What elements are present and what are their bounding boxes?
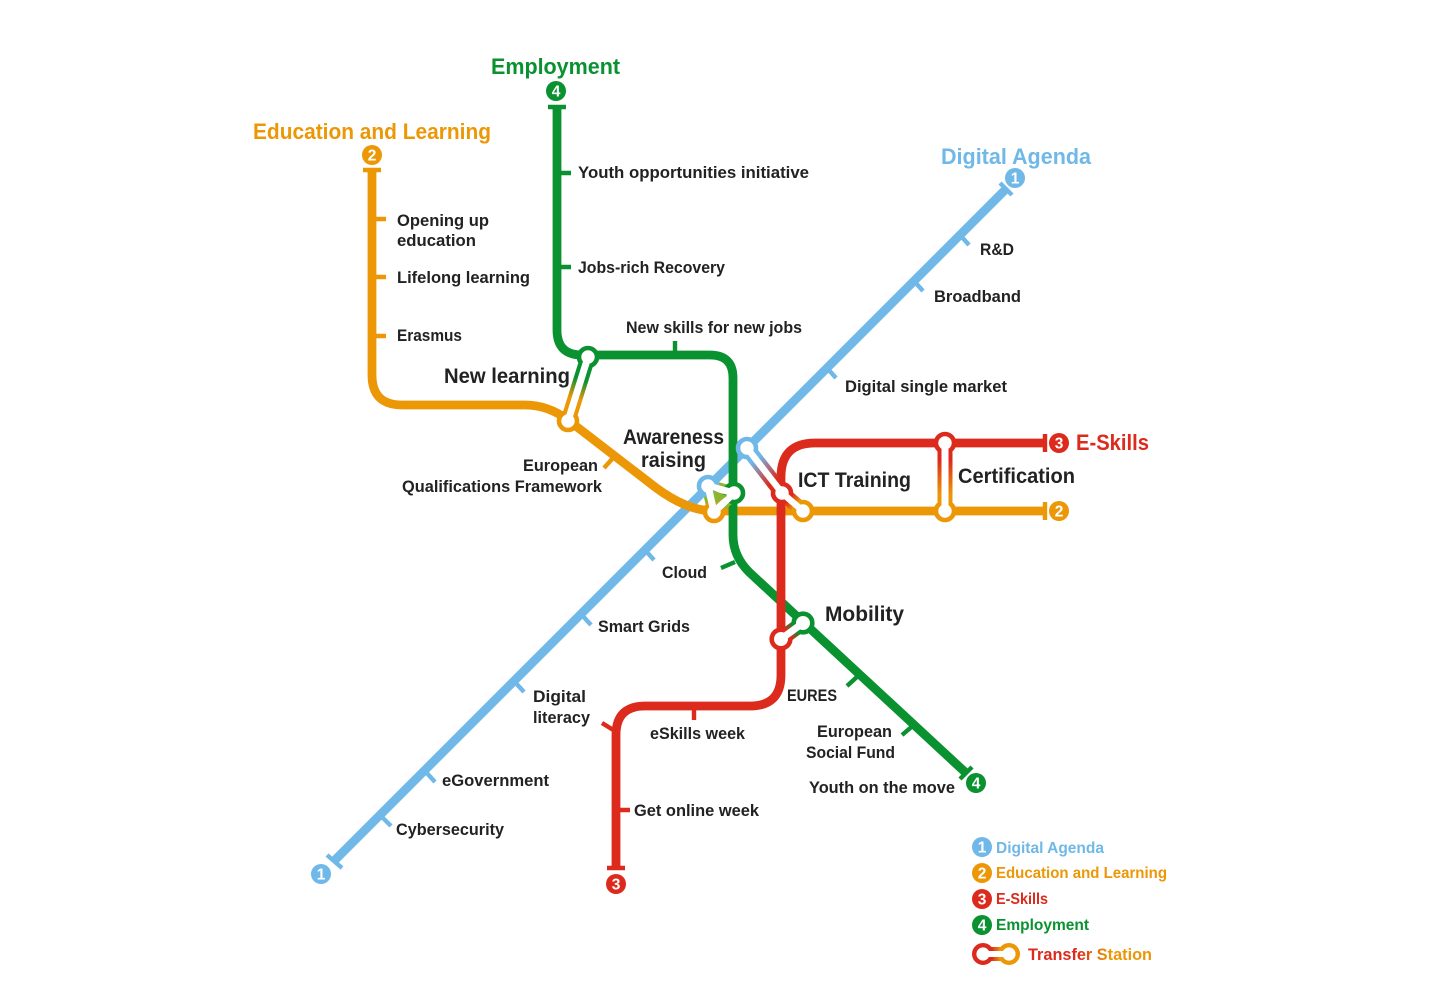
label: Opening up education: education xyxy=(397,231,476,250)
terminal: E-Skills right: 3 xyxy=(1055,436,1064,452)
label: R&D: R&D xyxy=(980,240,1014,259)
label: EURES: EURES xyxy=(787,686,837,705)
label: Lifelong learning: Lifelong learning xyxy=(397,268,530,287)
terminal: E-Skills bottom: 3 xyxy=(612,876,621,894)
label: Youth opportunities initiative: Youth opportunities initiative xyxy=(578,163,809,182)
label: European Social Fund xyxy=(806,722,895,762)
label: European Qualifications Framework xyxy=(402,456,603,496)
legend item: Employment: Employment xyxy=(996,917,1089,934)
legend item: Education and Learning: 2 xyxy=(978,866,986,882)
line: Education and Learning (orange) xyxy=(363,170,1045,520)
label: Opening up education xyxy=(397,211,489,250)
legend item: E-Skills: E-Skills xyxy=(996,891,1048,908)
label: European Qualifications Framework: Qualifications Framework xyxy=(402,477,603,496)
heading: Digital Agenda: Digital Agenda xyxy=(941,144,1091,169)
terminal: E-Skills bottom xyxy=(606,874,626,894)
legend item: Digital Agenda xyxy=(972,837,1104,857)
label: eSkills week: eSkills week xyxy=(650,724,746,743)
label: Cloud: Cloud xyxy=(662,563,707,582)
label: Awareness raising xyxy=(623,426,724,472)
terminal: Employment top xyxy=(546,81,566,101)
label: Awareness raising: raising xyxy=(641,449,706,472)
terminal: Education right: 2 xyxy=(1055,504,1063,520)
legend item: Transfer Station: Transfer Station xyxy=(1028,946,1152,964)
line: Digital Agenda (blue) xyxy=(327,183,1012,868)
label: Cybersecurity: Cybersecurity xyxy=(396,820,505,839)
terminal: Employment top: 4 xyxy=(552,84,561,100)
legend item: Digital Agenda: Digital Agenda xyxy=(996,840,1104,857)
transfer: ICT Training xyxy=(738,439,812,520)
label: Smart Grids: Smart Grids xyxy=(598,617,690,636)
label: Digital literacy xyxy=(533,687,591,727)
legend item: E-Skills xyxy=(972,889,1048,909)
transfer: Awareness raising xyxy=(699,477,743,521)
label: Certification: Certification xyxy=(958,465,1075,488)
terminal: Education top xyxy=(362,145,382,165)
line: Employment (green) xyxy=(548,107,972,779)
label: European Social Fund: Social Fund xyxy=(806,743,895,762)
label: New skills for new jobs: New skills for new jobs xyxy=(626,318,802,337)
legend xyxy=(972,837,1167,964)
label: New learning: New learning xyxy=(444,365,570,388)
terminal: Digital Agenda top xyxy=(1005,168,1025,188)
terminal: Digital Agenda top: 1 xyxy=(1011,170,1020,188)
terminal: Employment bottom xyxy=(966,773,986,793)
label: Youth on the move: Youth on the move xyxy=(809,778,955,797)
heading: E-Skills: E-Skills xyxy=(1076,430,1149,455)
label: Digital literacy: Digital xyxy=(533,687,586,706)
label: Opening up education: Opening up xyxy=(397,211,489,230)
legend item: Education and Learning: Education and Learning xyxy=(996,865,1167,882)
label: Digital literacy: literacy xyxy=(533,708,591,727)
transfer: New learning xyxy=(559,348,597,430)
heading: Education and Learning: Education and Learning xyxy=(253,119,491,144)
label: Mobility: Mobility xyxy=(825,603,904,626)
legend item: E-Skills: 3 xyxy=(978,892,987,908)
terminal: Digital Agenda bottom: 1 xyxy=(317,866,326,884)
legend item: Transfer Station xyxy=(974,945,1152,964)
legend item: Digital Agenda: 1 xyxy=(978,840,987,856)
terminal: Employment bottom: 4 xyxy=(972,776,981,792)
line: E-Skills (red) xyxy=(602,434,1045,868)
legend item: Employment: 4 xyxy=(978,918,987,934)
terminal: Education top: 2 xyxy=(368,148,376,164)
transfer: Certification xyxy=(936,434,954,520)
label: Awareness raising: Awareness xyxy=(623,426,724,449)
terminal: Education right xyxy=(1049,501,1069,521)
label: Digital single market: Digital single market xyxy=(845,377,1007,396)
transfer: Mobility xyxy=(772,614,812,648)
label: Get online week: Get online week xyxy=(634,801,760,820)
label: ICT Training: ICT Training xyxy=(798,469,911,492)
label: Jobs-rich Recovery: Jobs-rich Recovery xyxy=(578,258,726,277)
terminal: Digital Agenda bottom xyxy=(311,864,331,884)
label: European Qualifications Framework: European xyxy=(523,456,598,475)
heading: Employment: Employment xyxy=(491,54,620,79)
terminal: E-Skills right xyxy=(1049,433,1069,453)
label: Erasmus: Erasmus xyxy=(397,326,462,345)
label: Broadband: Broadband xyxy=(934,287,1021,306)
label: European Social Fund: European xyxy=(817,722,892,741)
legend item: Employment xyxy=(972,915,1089,935)
label: eGovernment: eGovernment xyxy=(442,771,549,790)
